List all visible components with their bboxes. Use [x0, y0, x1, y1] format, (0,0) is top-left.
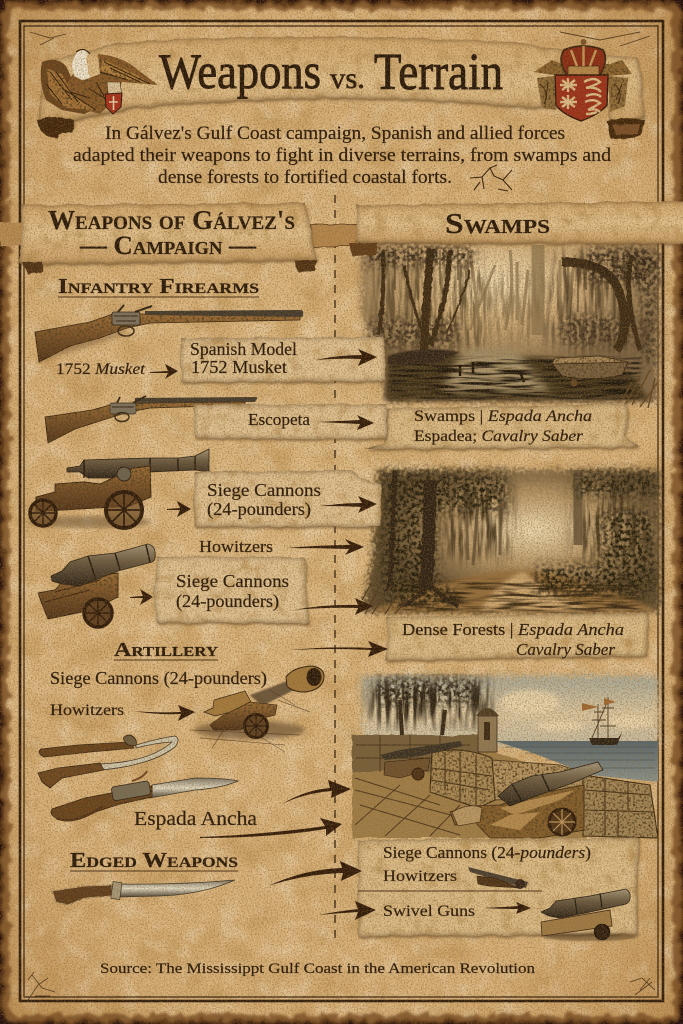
foreground cannon: [450, 762, 603, 838]
source line: Source: The Mississippt Gulf Coast in the American Revolution: [100, 961, 536, 977]
header banner: weapons of Gálvez's campaign: [20, 203, 317, 274]
box: siege cannons lower: [154, 556, 308, 623]
scene: coastal fort illustration: [352, 676, 658, 838]
carriage: [36, 466, 151, 511]
connector band: [0, 222, 360, 246]
clouds: [500, 690, 654, 731]
arrow: cannon to box: [167, 501, 191, 517]
swamp grass: [622, 370, 658, 408]
icon: howitzer on ruined ground: [190, 666, 324, 752]
title: [159, 43, 503, 101]
sky: [362, 676, 658, 746]
box: spanish model: 1752 Musket: [191, 357, 287, 377]
rowboat: [552, 356, 628, 386]
right stone wall: [583, 775, 658, 838]
box: spanish model: Spanish Model: [190, 339, 297, 359]
misty tree layers: [372, 252, 650, 352]
box: escopeta: [194, 404, 387, 439]
icon: siege cannon 1: [28, 449, 209, 528]
intro text: In Gálvez's Gulf Coast campaign, Spanish and allied forces: [105, 124, 565, 144]
box: escopeta: Escopeta: [248, 410, 311, 429]
crack ornament: [470, 165, 512, 191]
misty tree layers: [440, 478, 650, 558]
icon: knife: [52, 880, 235, 905]
box: fort weapons: [358, 838, 640, 941]
icon: small howitzer: [468, 867, 528, 889]
arrow: lower box to forest: [294, 598, 373, 615]
intro text: [73, 124, 612, 188]
banner scroll tails: [37, 117, 645, 139]
barrel: [67, 449, 209, 478]
label: 1752 musket: 1752 Musket: [56, 361, 146, 378]
label: howitzers: Howitzers: [199, 537, 273, 556]
watchtower: [476, 708, 499, 752]
ship: [582, 697, 622, 745]
foreground tree: [390, 470, 458, 606]
title: vs.: [330, 62, 365, 95]
box: fort weapons: Siege Cannons (24- pounders): [383, 843, 591, 862]
ground path: [370, 570, 660, 612]
icon: escopeta: [45, 396, 257, 443]
caption: swamps terrain: Swamps | Espada Ancha: [414, 408, 592, 425]
smoke smudge: [250, 680, 294, 706]
upper saber: [39, 742, 134, 757]
arrow: musket to box: [150, 364, 178, 379]
arrow: cannon 2 to box: [130, 589, 153, 605]
box: siege cannons top: [194, 470, 381, 527]
arrow: edged weapons to fort box: [268, 861, 362, 886]
arrow: siege cannons to forest: [320, 496, 377, 513]
title: Terrain: [374, 44, 503, 101]
swamp distant undergrowth: [368, 255, 658, 365]
crown: [561, 39, 605, 76]
intro text: adapted their weapons to fight in diverse terrains, from swamps and: [73, 146, 612, 166]
box: spanish model: [181, 337, 386, 382]
box: fort weapons: Swivel Guns: [383, 903, 475, 920]
left wall and ground: [352, 735, 610, 838]
header banner: swamps: Swamps: [445, 208, 550, 240]
paving stones: [355, 735, 470, 836]
curved saber: [100, 736, 178, 770]
shield: [555, 75, 608, 121]
box: siege cannons lower: Siege Cannons: [176, 571, 289, 591]
icon: royal coat of arms: [534, 39, 632, 121]
box: siege cannons top: (24-pounders): [207, 499, 311, 520]
icon: siege cannon 2: [38, 544, 155, 627]
arrow: escopeta to swamps: [317, 415, 374, 430]
hanging moss and foliage: [365, 246, 657, 318]
forest foliage: [382, 472, 657, 607]
arrow: edged weapons to swivel guns: [318, 901, 376, 920]
section heading: artillery: Artillery: [114, 639, 218, 661]
barrel and muzzle: [204, 691, 252, 716]
stone bastion: [430, 750, 590, 808]
arrow: espada ancha to fort: [200, 818, 342, 838]
header banner: weapons of Gálvez's campaign: — Campaign —: [79, 231, 257, 260]
scene: dense forest illustration: [362, 470, 660, 614]
banner ribbon: [38, 36, 645, 128]
icon: swivel gun: [541, 889, 636, 941]
barrel: [51, 544, 155, 586]
header banner: weapons of Gálvez's campaign: Weapons of Gálvez's: [48, 205, 295, 235]
large wheel: [106, 492, 142, 528]
upper wall cannon: [380, 741, 463, 780]
header banner: swamps: [349, 201, 683, 256]
caption: swamps terrain: [364, 404, 640, 449]
trees on the wall: [370, 680, 490, 724]
section heading: edged weapons: Edged Weapons: [70, 848, 238, 872]
caption: dense forests terrain: [385, 613, 648, 660]
icon: eagle with shield: [41, 49, 158, 114]
icon: sabers: [38, 735, 178, 788]
wheel: [84, 599, 112, 627]
arrow: swivel guns: [484, 902, 531, 914]
sea: [495, 741, 658, 782]
scene: swamp illustration: [360, 245, 658, 408]
carriage steps: [38, 573, 118, 619]
misty background trees: [470, 245, 612, 340]
section heading: infantry firearms: Infantry Firearms: [58, 274, 259, 298]
swamp water: [385, 349, 650, 400]
carriage: [210, 702, 277, 730]
icon: spanish model 1752 musket: [35, 305, 303, 362]
small wheel: [30, 500, 56, 526]
caption: swamps terrain: Espadea; Cavalry Saber: [414, 428, 584, 445]
caption: dense forests terrain: Dense Forests | Espada Ancha: [402, 620, 624, 639]
icon: espada ancha sword: [51, 771, 238, 820]
caption: dense forests terrain: Cavalry Saber: [516, 640, 616, 659]
arrow: howitzers: [286, 539, 364, 555]
forest undergrowth: [362, 582, 410, 614]
dark swamp foreground trees: [378, 248, 640, 350]
label: siege cannons 24-pounders: Siege Cannons (24-pounders): [50, 668, 267, 688]
box: siege cannons top: Siege Cannons: [207, 480, 321, 500]
arrow: artillery to dense forests: [290, 641, 388, 657]
title banner: [37, 36, 645, 139]
title: Weapons: [159, 43, 321, 99]
label: howitzers artillery: Howitzers: [50, 702, 124, 719]
wheel: [244, 714, 268, 738]
arrow: spanish model to swamps: [316, 349, 377, 366]
intro text: dense forests to fortified coastal forts.: [158, 168, 452, 188]
arrow: howitzers to cannon: [134, 705, 195, 721]
background trunks: [465, 470, 618, 565]
box: siege cannons lower: (24-pounders): [176, 591, 279, 611]
arrow: sword to fort upper: [282, 780, 351, 804]
box: fort weapons: Howitzers: [383, 868, 457, 885]
label: espada ancha: Espada Ancha: [134, 808, 257, 830]
center dashed divider: [334, 195, 336, 945]
